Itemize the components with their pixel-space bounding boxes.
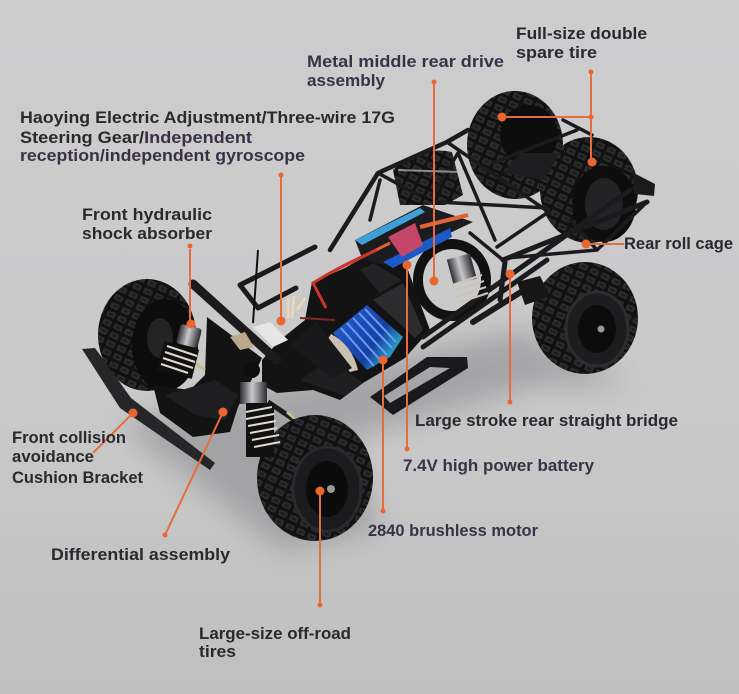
label: spare tire — [516, 24, 647, 62]
leader: front collision bracket — [93, 408, 138, 453]
label: off-road tires: Large-size off-road — [199, 624, 351, 643]
label: metal middle rear drive assembly — [307, 52, 504, 90]
label: front collision avoidance cushion bracket — [12, 428, 143, 487]
label: rear roll cage: Rear roll cage — [624, 234, 733, 253]
leader: front hydraulic shock absorber — [186, 244, 196, 328]
roll cage — [330, 120, 655, 347]
leader: Metal middle rear drive assembly — [430, 80, 438, 286]
front shock right — [240, 362, 280, 457]
car illustration — [82, 91, 655, 541]
motor heatsink — [290, 305, 403, 378]
ground shadow — [120, 330, 630, 550]
battery and wires — [230, 205, 473, 350]
leader: rear roll cage — [582, 240, 624, 248]
label: steering gear and gyroscope: reception/independent gyroscope — [20, 146, 305, 165]
label: metal middle rear drive assembly: assembly — [307, 71, 386, 90]
label: brushless motor: 2840 brushless motor — [368, 521, 538, 540]
leader: brushless motor — [378, 356, 388, 514]
label: differential assembly: Differential assembly — [51, 545, 231, 564]
leader: battery — [402, 260, 412, 452]
leader: rear straight bridge — [506, 270, 514, 404]
wheel: front right — [257, 415, 373, 541]
label: front hydraulic shock absorber — [82, 205, 212, 243]
leader: off-road tires — [316, 486, 324, 608]
rear axle arms — [473, 276, 550, 322]
label: steering gear and gyroscope — [20, 108, 395, 165]
leader: differential assembly — [162, 408, 228, 538]
label: large stroke rear straight bridge: Large stroke rear straight bridge — [415, 411, 678, 430]
label: metal middle rear drive assembly: Metal middle rear drive — [307, 52, 504, 71]
wheel: far rear behind cage — [393, 150, 463, 205]
label: front collision avoidance cushion bracket: Front collision — [12, 428, 126, 447]
leader: steering gear — [276, 172, 286, 326]
wheel: upper spare tire — [467, 91, 563, 199]
label: front hydraulic shock absorber: shock absorber — [82, 224, 212, 243]
label: front collision avoidance cushion bracket: Cushion Bracket — [12, 468, 143, 487]
label: steering gear and gyroscope: Steering Gear/ Independent — [20, 128, 252, 147]
label: off-road tires: tires — [199, 642, 236, 661]
wheel: mid rear behind frame — [418, 244, 486, 316]
front shock left — [157, 324, 202, 379]
rear shock — [447, 253, 488, 303]
central chassis tub — [262, 258, 430, 400]
label: steering gear and gyroscope: Haoying Electric Adjustment/Three-wire 17G — [20, 108, 395, 127]
chassis plate — [370, 357, 468, 415]
label: front collision avoidance cushion bracket: avoidance — [12, 447, 94, 466]
label: front hydraulic shock absorber: Front hydraulic — [82, 205, 212, 224]
label: off-road tires — [199, 624, 351, 661]
front suspension and arms — [153, 284, 302, 437]
wheel: lower spare tire — [540, 137, 638, 243]
label: spare tire: spare tire — [516, 43, 597, 62]
label: battery: 7.4V high power battery — [403, 456, 595, 475]
front bumper — [82, 348, 215, 470]
side frame rails — [240, 247, 315, 308]
leader: spare tire — [498, 70, 596, 166]
label: spare tire: Full-size double — [516, 24, 647, 43]
wheel: front left — [98, 279, 198, 391]
wheel: rear right — [532, 262, 638, 374]
